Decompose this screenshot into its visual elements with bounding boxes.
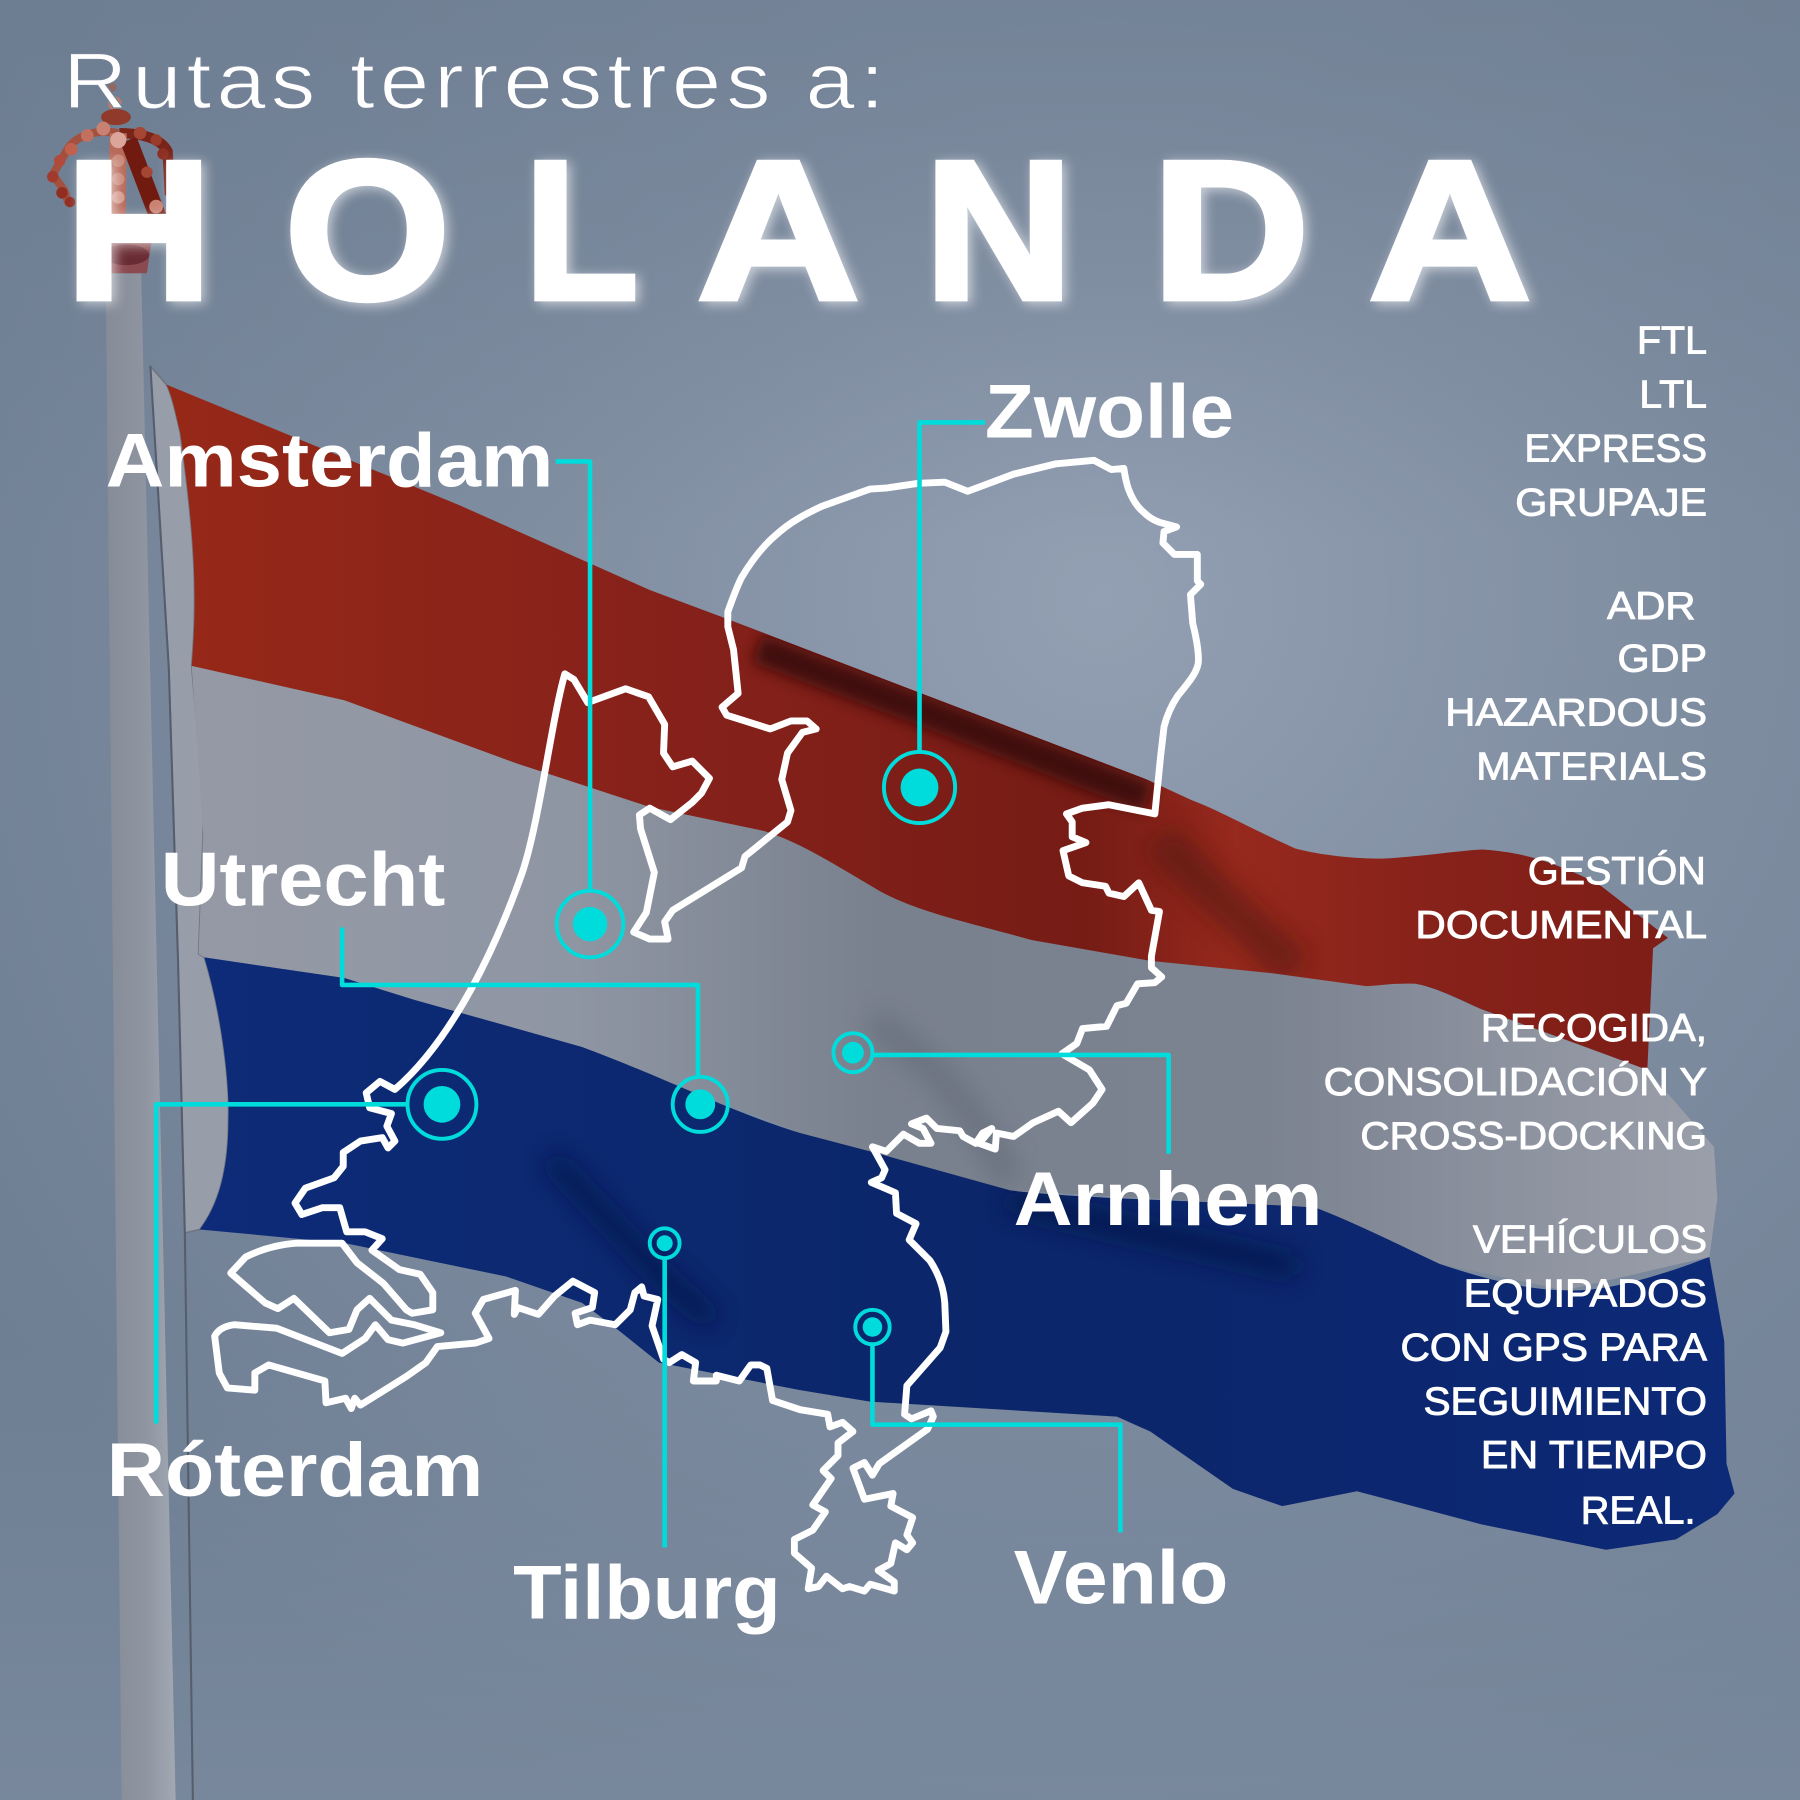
marker: Tilburg: Tilburg <box>513 1551 781 1636</box>
marker: Utrecht <box>161 838 728 1132</box>
title: HOLANDA: L <box>525 119 638 340</box>
flagpole with crown finial <box>47 82 176 1800</box>
pole shaft <box>106 273 176 1800</box>
services: GPS vehicles: REAL. <box>1581 1489 1696 1532</box>
services: hazardous goods: MATERIALS <box>1476 745 1707 788</box>
services: transport types: LTL <box>1639 374 1707 417</box>
services: hazardous goods: HAZARDOUS <box>1445 692 1707 735</box>
marker: Zwolle <box>884 369 1234 823</box>
white stripe fold shadow <box>872 1022 1010 1182</box>
services: transport types: GRUPAJE <box>1515 481 1707 524</box>
marker: Amsterdam: Amsterdam <box>106 419 553 504</box>
marker: Arnhem <box>833 1033 1322 1242</box>
services: transport types <box>1515 320 1707 524</box>
services: consolidation <box>1324 1007 1707 1158</box>
title: HOLANDA: H <box>66 119 212 340</box>
marker: Arnhem: Arnhem <box>1014 1157 1322 1242</box>
crown base collar <box>108 241 152 273</box>
crown finial <box>47 82 170 273</box>
marker: Róterdam: Róterdam <box>107 1428 483 1513</box>
hoist rope <box>150 366 193 1800</box>
blue stripe <box>200 957 1735 1550</box>
marker: Venlo <box>855 1310 1228 1621</box>
marker: Venlo: Venlo <box>1014 1536 1228 1621</box>
title: HOLANDA: D <box>1152 119 1309 340</box>
services: GPS vehicles: CON GPS PARA <box>1401 1326 1707 1369</box>
services: GPS vehicles: EN TIEMPO <box>1481 1434 1707 1477</box>
marker: Zwolle: Zwolle <box>985 369 1234 454</box>
title: HOLANDA <box>66 119 1531 340</box>
services: documents: DOCUMENTAL <box>1415 904 1707 947</box>
services: transport types: EXPRESS <box>1524 427 1707 470</box>
marker: Amsterdam <box>106 419 623 957</box>
services: hazardous goods: GDP <box>1617 638 1707 681</box>
services: hazardous goods <box>1445 585 1707 788</box>
map outline of the Netherlands <box>215 460 1201 1591</box>
title: HOLANDA: O <box>285 119 450 340</box>
flag of the Netherlands <box>150 366 1735 1800</box>
services: documents <box>1415 850 1707 947</box>
title: HOLANDA: A <box>697 119 859 340</box>
services: GPS vehicles: VEHÍCULOS <box>1473 1218 1707 1261</box>
marker: Utrecht: Utrecht <box>161 838 445 923</box>
white stripe <box>192 666 1717 1290</box>
services: hazardous goods: ADR <box>1607 585 1696 628</box>
title: HOLANDA: A <box>1369 119 1531 340</box>
red stripe fold shadows <box>758 649 1297 970</box>
services: transport types: FTL <box>1637 320 1707 363</box>
services: consolidation: CONSOLIDACIÓN Y <box>1324 1061 1707 1104</box>
services: documents: GESTIÓN <box>1528 850 1706 893</box>
services: consolidation: RECOGIDA, <box>1481 1007 1707 1050</box>
services: GPS vehicles <box>1401 1218 1707 1532</box>
services: GPS vehicles: SEGUIMIENTO <box>1423 1380 1707 1423</box>
marker: Tilburg <box>513 1228 781 1636</box>
marker: Róterdam <box>107 1070 483 1513</box>
services: GPS vehicles: EQUIPADOS <box>1464 1272 1707 1315</box>
services: consolidation: CROSS-DOCKING <box>1360 1115 1707 1158</box>
flag sleeve at the hoist <box>150 366 229 1233</box>
services list <box>1324 320 1707 1532</box>
blue stripe fold shadows <box>551 1159 1297 1320</box>
title: HOLANDA: N <box>925 119 1073 340</box>
red stripe <box>166 385 1668 1070</box>
title line: Rutas terrestres a:: Rutas terrestres a: <box>63 36 890 125</box>
